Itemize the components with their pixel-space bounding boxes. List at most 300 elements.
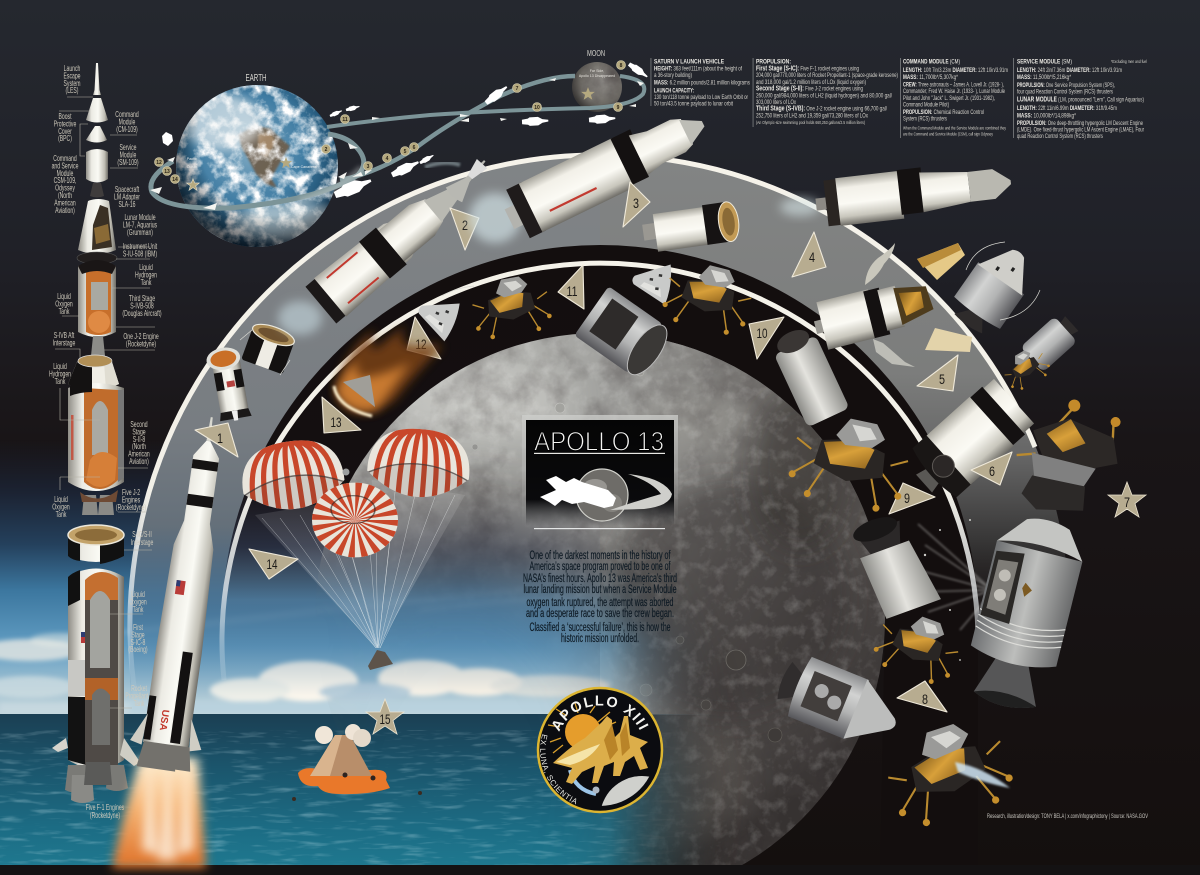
step 5: triangle marker: [917, 355, 958, 391]
spent S-IC stage: [205, 345, 252, 424]
band: [970, 387, 1025, 445]
specification column: command module: COMMAND MODULE (CM): [903, 58, 960, 66]
step 11: LM with CM and SM jettison: [574, 256, 757, 382]
title underline: [534, 453, 665, 454]
specification column: propulsion: 303,000 liters of LOx: [756, 99, 797, 106]
specification column: service and lunar modules: LENGTH: 24ft 2in/7.36m DIAMETER: 12ft 10in/3.91m: [1017, 67, 1122, 74]
stack labels: (North: [132, 443, 146, 452]
specification column: Saturn V: HEIGHT: 363 feet/111m (about the height of: [654, 66, 742, 72]
stencil on second stage: [71, 415, 74, 460]
service module, oxygen tank rupture: [959, 509, 1090, 716]
trajectory numbered markers: 7: [516, 86, 519, 92]
step 10: triangle marker: [749, 317, 784, 359]
large moon: [315, 333, 885, 868]
spacecraft lunar adapter: [78, 199, 116, 254]
step 14: triangle marker: [249, 549, 298, 579]
specification column: propulsion: [753, 58, 898, 127]
stack labels: [49, 65, 162, 820]
stack labels: Odyssey: [55, 185, 75, 193]
step 7: star marker: 7: [1124, 494, 1130, 510]
stack labels: Five F-1 Engines: [86, 804, 125, 812]
descending capsule: [368, 650, 393, 670]
trajectory numbered markers: 4: [386, 156, 389, 162]
step 15: star marker: 15: [380, 711, 391, 727]
fins: [52, 738, 68, 752]
specification column: propulsion: and 318,000 gal/1.2 million liters of LOx (liquid oxygen): [756, 79, 866, 86]
stack labels: Tank: [134, 700, 145, 708]
third stage: [835, 171, 904, 226]
trajectory numbered markers: 3: [367, 164, 370, 170]
engine nozzle: [972, 653, 1046, 714]
white panel upper: [865, 243, 895, 285]
capsule: [343, 375, 375, 407]
specification column: command module: Command Module Pilot): [903, 102, 949, 108]
stack labels: (SM-109): [117, 159, 139, 167]
stack labels: S-IC/S-II: [132, 531, 152, 539]
second stage: [519, 138, 636, 232]
stack labels: Liquid: [57, 293, 71, 301]
stack labels: American: [54, 199, 76, 208]
stack labels: Command: [53, 155, 77, 163]
ocean: [0, 714, 694, 865]
trajectory direction arrows: [150, 78, 644, 210]
first stage black stripes: [68, 570, 80, 606]
stage 4: third stage burn: [813, 157, 1014, 228]
mission summary text: lunar landing mission but when a Service Module: [524, 582, 677, 596]
light frame: [522, 415, 678, 527]
forward skirt: [984, 379, 1034, 433]
jettisoned adapter panels: [865, 243, 972, 367]
specification column: command module: [900, 58, 1008, 138]
stack labels: Module: [57, 170, 73, 178]
trajectory numbered markers: [154, 60, 626, 184]
stack labels: Service: [120, 144, 137, 152]
location stars and place names: Cape Canaveral: [291, 165, 317, 169]
command module cone: [997, 509, 1090, 562]
specification column: service and lunar modules: PROPULSION: One Service Propulsion System (SPS),: [1017, 82, 1115, 89]
earth front clouds on orbit: [300, 168, 362, 202]
exhaust plume, stage 4: [780, 198, 820, 216]
transposition: CSM turning: [945, 236, 1042, 342]
specification column: command module: CREW: Three astronauts – James A. Lovell Jr. (1928- ),: [903, 82, 1004, 88]
specification column: Saturn V: [651, 58, 750, 108]
black band: [610, 129, 653, 185]
stack labels: Instrument Unit: [123, 243, 157, 251]
specification column: service and lunar modules: MASS: 11,500lb*/5,216kg*: [1017, 74, 1071, 81]
parachute descent: [233, 420, 477, 670]
stack labels: Tank: [59, 308, 70, 316]
specification column: command module: Pilot and John "Jack" L. Swigert Jr. (1931-1982),: [903, 95, 995, 102]
small moon: Apollo 13 Disappeared: [579, 74, 615, 78]
descent engine burn: [955, 762, 1010, 788]
step 3: triangle marker: [623, 182, 650, 227]
specification column: Saturn V: 50 ton/43.5 tonne payload to lunar orbit: [654, 100, 733, 108]
stack labels: Second: [130, 421, 148, 429]
launch: rocket exhaust flame: [112, 758, 206, 868]
specification column: Saturn V: SATURN V LAUNCH VEHICLE: [654, 58, 724, 66]
specification column: command module: Commander; Fred W. Haise Jr. (1933- ), Lunar Module: [903, 88, 1005, 95]
stack labels: LM-7, Aquarius: [123, 221, 158, 230]
stage body: [927, 397, 1014, 485]
step 15: star marker: [366, 699, 404, 734]
black roll bands: [186, 459, 219, 508]
gold panel: [917, 243, 965, 280]
stack labels: Tank: [55, 378, 66, 386]
damaged bay: [980, 547, 1027, 624]
stack labels: Protective: [54, 120, 76, 129]
step 12: triangle marker: [407, 317, 441, 359]
third stage top dark ring: [78, 260, 116, 274]
stack labels: (Boeing): [128, 646, 148, 655]
stack labels: S-IVB Aft: [54, 332, 74, 340]
badge top text: [556, 706, 644, 750]
Apollo XIII mission badge: EX LUNA, SCIENTIA: [540, 734, 576, 804]
trajectory numbered markers: 12: [156, 160, 162, 166]
stack labels: (CM-109): [116, 126, 138, 134]
mission summary text: oxygen tank ruptured, the attempt was aborted: [526, 595, 674, 609]
specification column: command module: MASS: 11,700lb*/5,307kg*: [903, 74, 958, 81]
mission summary text: America’s space program proved to be one of: [530, 559, 671, 573]
stack labels: Five J-2: [122, 489, 140, 497]
stack labels: Tank: [56, 511, 67, 519]
stack labels: Tank: [141, 279, 152, 287]
radiator ribs: [974, 608, 1065, 655]
stack at step 10: SM and LM near moon: [768, 323, 915, 516]
white arc rings: [130, 155, 1035, 700]
step 3: triangle marker: 3: [633, 195, 639, 211]
service engine nozzle: [90, 183, 104, 198]
specification column: service and lunar modules: quad Reaction Control System (RCS) thrusters: [1017, 133, 1103, 140]
first stage cutaway: [85, 580, 118, 766]
specification column: service and lunar modules: four quad Reaction Control System (RCS) thrusters: [1017, 88, 1113, 96]
stack labels: First: [133, 624, 143, 632]
stack labels: Module: [120, 151, 136, 160]
five J-2 engines: [82, 495, 114, 515]
black inner arc band: [222, 245, 978, 875]
re-entry fireball: [334, 325, 443, 416]
stack labels: Liquid: [131, 591, 145, 599]
instrument unit ring: [77, 252, 117, 264]
launch escape tower: [206, 417, 214, 441]
step 2: triangle marker: 2: [462, 217, 468, 233]
stack labels: Cover: [58, 128, 72, 136]
step 7: star marker: [1108, 482, 1146, 517]
grey arc band: [130, 153, 1070, 720]
first stage body: [68, 568, 124, 769]
S-IC S-II interstage: [68, 535, 124, 562]
stack labels: S-IC-8: [131, 639, 145, 647]
command module re-entry attitude: [411, 290, 462, 342]
specification column: service and lunar modules: PROPULSION: One deep-throttling hypergolic LM Descent Engine: [1017, 120, 1143, 127]
stack labels: Liquid: [54, 496, 68, 504]
first stage separation: [205, 320, 297, 424]
LES tower: [93, 63, 101, 95]
stack labels: (Rocketdyne): [126, 340, 156, 349]
stack labels: Interstage: [53, 339, 75, 348]
stack labels: Oxygen: [129, 598, 147, 607]
emblem moon: [576, 469, 628, 521]
stack labels: (Rocketdyne): [116, 504, 146, 512]
stack labels: Module: [119, 118, 135, 127]
specification column: propulsion: (An Olympic-size swimming pool holds 660,253 gallons/2.5 million liters): [756, 120, 865, 125]
stack labels: Tank: [133, 606, 144, 614]
third stage: [629, 112, 697, 175]
specification column: command module: PROPULSION: Chemical Reaction Control: [903, 109, 984, 116]
second stage: [314, 217, 420, 317]
flag: [175, 580, 186, 595]
spacecraft nose: [424, 180, 466, 222]
stack labels: Lunar Module: [124, 214, 156, 222]
stack labels: S-II-8: [133, 436, 145, 444]
lower rule: [534, 528, 665, 529]
badge motto: [540, 732, 607, 809]
left canopy: [233, 430, 354, 534]
mission summary text: One of the darkest moments in the history of: [530, 548, 671, 562]
step 1: triangle marker: [195, 423, 238, 457]
second stage cutaway: [84, 388, 118, 489]
stack labels: Launch: [64, 65, 80, 73]
specification column: service and lunar modules: SERVICE MODULE (SM): [1017, 58, 1072, 66]
moon label: MOON: [587, 48, 605, 58]
stack labels: Interstage: [131, 539, 153, 547]
engine end: [909, 433, 974, 500]
stack labels: Stage: [131, 631, 145, 640]
stack at step 9: nozzle, SM and LM: [849, 507, 966, 689]
mission summary text: NASA’s finest hours. Apollo 13 was America’s third: [523, 571, 677, 585]
trajectory numbered markers: 9: [617, 105, 620, 111]
exhaust plume, stage 3: [469, 193, 521, 243]
first stage grey section: [68, 660, 85, 696]
five F-1 engines: [65, 765, 128, 803]
boost protective cover: [86, 98, 108, 122]
step 8: triangle marker: [897, 681, 947, 712]
explosion debris: [879, 519, 986, 661]
step 6: triangle marker: 6: [989, 463, 995, 479]
stack labels: Oxygen: [52, 503, 70, 512]
black panel: [526, 420, 674, 526]
stack labels: Liquid: [139, 264, 153, 272]
trajectory numbered markers: 10: [534, 105, 540, 111]
adapter cutaway with lunar module: [92, 205, 112, 250]
rocket exhaust plume, stage 2: [278, 301, 322, 335]
specification column: service and lunar modules: [1013, 58, 1147, 140]
second stage engines: [505, 202, 530, 229]
lunar module jettison: [468, 272, 554, 342]
step 4: triangle marker: 4: [809, 249, 815, 265]
specification column: service and lunar modules: MASS: 10,000lb*/14,898kg*: [1017, 112, 1076, 120]
stack labels: (Rocketdyne): [90, 812, 120, 820]
stack labels: Engines: [122, 496, 141, 505]
stack labels: (BPC): [58, 135, 72, 144]
specification column: service and lunar modules: LENGTH: 22ft 11in/6.99m DIAMETER: 31ft/9.45m: [1017, 105, 1117, 112]
stack labels: Hydrogen: [135, 271, 157, 280]
earth label: EARTH: [246, 72, 266, 84]
stack labels: Third Stage: [129, 295, 155, 303]
small moon: [572, 62, 622, 112]
step 12: triangle marker: 12: [416, 336, 427, 352]
mission summary text: and a desperate race to save the crew began.: [526, 606, 674, 620]
trajectory: parking orbit and translunar path: [151, 76, 644, 208]
stencil lettering: [549, 187, 597, 212]
step 11: triangle marker: [558, 265, 584, 309]
spent second stage: [641, 200, 741, 253]
emblem orbit band: [610, 474, 672, 510]
sun: [565, 714, 601, 750]
module cylinder: [969, 541, 1082, 674]
service module jettisoned: [574, 286, 675, 382]
explosion rays: [915, 524, 992, 630]
USA lettering: USA: [157, 709, 171, 731]
stack labels: Escape: [64, 72, 81, 81]
step 6: triangle marker: [971, 452, 1012, 485]
trajectory numbered markers: 13: [164, 169, 170, 175]
stack labels: Hydrogen: [49, 370, 71, 379]
specification column: command module: System (RCS) thrusters: [903, 116, 947, 122]
location stars and place names: [187, 87, 595, 190]
grey panel lower: [873, 339, 915, 367]
right canopy: [360, 420, 477, 520]
stack labels: (Grumman): [127, 229, 153, 237]
parachute lines: [255, 480, 465, 648]
drogue: [342, 468, 350, 476]
splashdown: capsule and raft: [292, 724, 422, 801]
stack labels: System: [64, 80, 81, 88]
stage: S-IVB with lunar module: [810, 275, 937, 351]
specification column: propulsion: Second Stage (S-II): Five J-2 rocket engines using: [756, 84, 863, 92]
stack labels: Liquid: [53, 363, 67, 371]
stack labels: LM Adapter: [114, 193, 141, 202]
capsule cone: [310, 735, 372, 776]
lunar module, large: [1005, 389, 1130, 526]
stack labels: One J-2 Engine: [123, 333, 159, 341]
stack labels: Stage: [132, 428, 146, 437]
step 9: triangle marker: 9: [904, 490, 910, 506]
service module: [86, 149, 108, 182]
lunar limb: [568, 770, 650, 806]
stage 3: third stage firing: [497, 99, 715, 243]
stack labels: Aviation): [55, 207, 75, 215]
step 14: triangle marker: 14: [266, 556, 278, 572]
specification column: service and lunar modules: LUNAR MODULE (LM, pronounced "Lem", Call sign Aquarius): [1017, 96, 1144, 104]
stack labels: Boost: [59, 113, 72, 121]
adapter: [919, 167, 971, 212]
stack labels: American: [128, 451, 150, 459]
S-IVB aft interstage: [68, 356, 119, 390]
F-1 engines: [136, 740, 194, 774]
stack leader lines: [55, 97, 155, 708]
fins: [130, 711, 205, 753]
step 2: triangle marker: [450, 208, 479, 250]
title panel: [522, 415, 678, 529]
bottom black strip: [0, 865, 1200, 875]
stack labels: S-IU-508 (IBM): [123, 250, 157, 259]
engine skirt: [305, 278, 347, 324]
step 8: triangle marker: 8: [922, 691, 928, 707]
step 9: triangle marker: [889, 483, 935, 514]
stage 2: second stage firing: [305, 172, 473, 324]
stack labels: Aviation): [129, 458, 149, 466]
orange flotation raft: [298, 768, 390, 794]
stack labels: (LES): [66, 87, 78, 96]
CSM: [770, 650, 907, 755]
light panel lower: [925, 328, 972, 352]
J-2 engine: [91, 336, 105, 356]
lunar module: [878, 712, 1019, 833]
step 1: triangle marker: 1: [217, 430, 223, 446]
step 8: CSM and lunar module swing-around: [770, 650, 1019, 833]
specification column: propulsion: Third Stage (S-IVB): One J-2 rocket engine using 66,700 gal/: [756, 104, 887, 112]
nose: [679, 111, 709, 145]
stack labels: SLA-16: [119, 201, 136, 209]
J-2 engine: [916, 463, 945, 492]
CSM section: [967, 167, 1013, 202]
stack labels: S-IVB-508: [130, 302, 154, 311]
stack labels: Spacecraft: [115, 186, 139, 194]
uprighting balloons: [315, 726, 333, 744]
stack labels: Rocket: [131, 685, 147, 693]
specification column: propulsion: First Stage (S-IC): Five F-1 rocket engines using: [756, 64, 859, 72]
specification column: propulsion: 252,750 liters of LH2 and 19,359 gal/73,280 liters of LOx: [756, 112, 869, 120]
launch: Saturn V on ascent: [127, 412, 247, 775]
stage 6: spent S-IVB toward trans-lunar: [901, 377, 1036, 507]
stack labels: Oxygen: [55, 300, 73, 309]
specification column: Saturn V: a 36-story building): [654, 72, 692, 79]
specification column: command module: are the Command and Service Module (CSM), call sign Odyssey: [903, 132, 993, 136]
trajectory spacecraft silhouettes: [162, 61, 649, 201]
mission summary text: [523, 548, 677, 645]
CM with LM at right: [630, 259, 673, 305]
specification column: propulsion: PROPULSION:: [756, 58, 791, 66]
step 13: triangle marker: [322, 397, 361, 433]
stack labels: Command: [115, 111, 139, 119]
specification column: propulsion: 260,000 gal/984,000 liters of LH2 (liquid hydrogen) and 80,000 gal/: [756, 92, 892, 100]
command module: [86, 126, 107, 142]
transposition arrows: [966, 242, 1040, 320]
trajectory numbered markers: 11: [342, 117, 348, 123]
specification column: Saturn V: LAUNCH CAPACITY:: [654, 88, 694, 94]
red lettering: [326, 252, 358, 279]
Apollo XIII mission badge: [536, 686, 664, 814]
chariot horses: [553, 716, 648, 784]
stack labels: (North: [58, 192, 72, 200]
APOLLO 13 title: APOLLO 13: [534, 426, 664, 456]
third stage cutaway tanks: [86, 268, 111, 335]
black interstage band: [359, 228, 407, 279]
trajectory numbered markers: 14: [172, 177, 178, 183]
third stage body: [78, 262, 116, 337]
specification column: service and lunar modules: *Excluding men and fuel: [1111, 59, 1147, 64]
stack labels: CSM-109,: [54, 177, 77, 186]
first stage flag: [81, 632, 85, 643]
specification column: propulsion: 204,000 gal/770,000 liters of Rocket Propellant-1 (space-grade kerosene): [756, 72, 898, 79]
step 5: triangle marker: 5: [939, 371, 945, 387]
black band: [897, 167, 926, 215]
crew and divers: [342, 772, 348, 778]
specification column: command module: LENGTH: 10ft 7in/3.23m DIAMETER: 12ft 10in/3.91m: [903, 67, 1008, 74]
mission summary text: Classified a ‘successful failure’, this is how the: [530, 620, 671, 634]
step 13: triangle marker: 13: [330, 414, 342, 430]
trajectory numbered markers: 6: [413, 145, 416, 151]
stack labels: and Service: [52, 162, 79, 171]
jettisoned escape tower: [425, 153, 493, 204]
second stage body: [68, 383, 124, 491]
third stage: [378, 195, 447, 261]
trajectory numbered markers: 8: [620, 63, 623, 69]
engine skirt: [506, 182, 546, 238]
emblem spacecraft: [540, 476, 616, 508]
engine: [815, 197, 833, 211]
step 4: triangle marker: [792, 232, 826, 277]
